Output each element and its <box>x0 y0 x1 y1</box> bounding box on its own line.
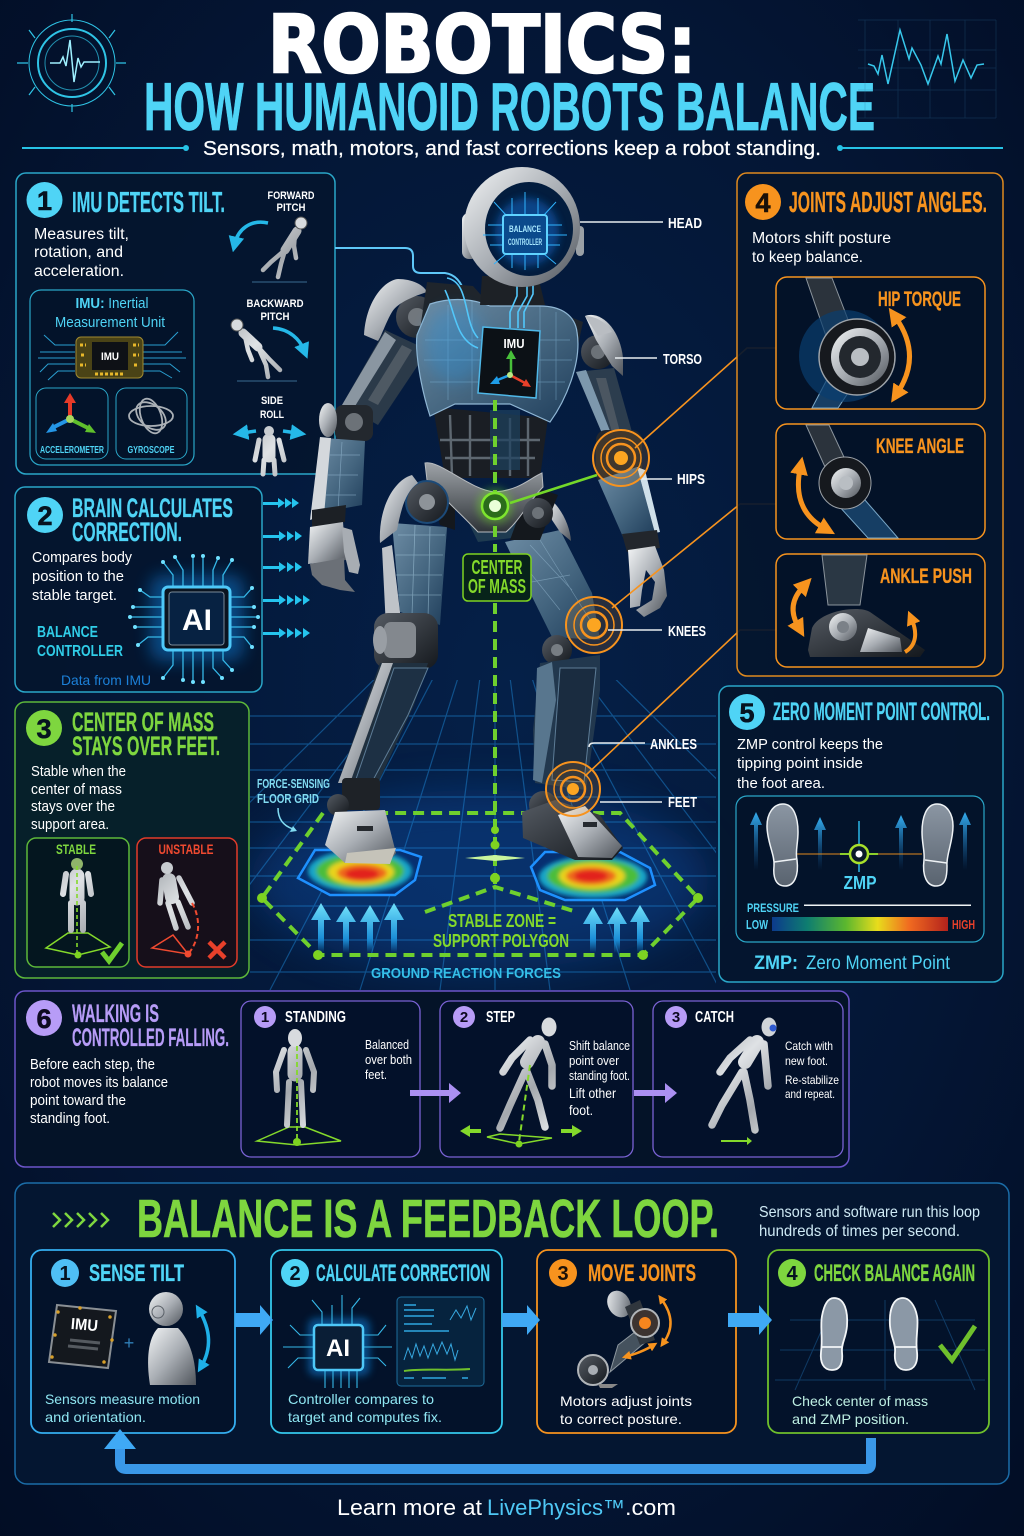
ZMP definition <box>754 953 951 974</box>
pressure arrows <box>750 812 971 870</box>
ribs <box>433 407 548 478</box>
badge 1 <box>26 182 62 218</box>
body part labels: HIPS <box>677 471 705 488</box>
foot floor grid <box>775 1300 985 1390</box>
heading <box>72 1000 229 1052</box>
footer: LivePhysics™ <box>487 1495 625 1520</box>
floor grid <box>250 680 716 990</box>
icon: left sole <box>821 1298 847 1370</box>
ZMP target <box>840 821 878 872</box>
body text: Measures tilt, <box>34 226 129 243</box>
balance controller label <box>37 624 123 660</box>
left shoe print <box>767 804 798 886</box>
center of mass line <box>257 400 703 960</box>
footer: .com <box>625 1495 676 1520</box>
badge 4: 4 <box>755 188 771 218</box>
body text: Stable when the <box>31 764 126 780</box>
heading <box>72 707 220 761</box>
label: center of mass: CENTER <box>472 557 523 579</box>
chevrons <box>53 1213 108 1227</box>
orange connector lines <box>585 348 776 776</box>
torso shell <box>417 300 578 422</box>
icon: IMU chip <box>38 332 186 380</box>
box 4: check balance again: and ZMP position. <box>792 1411 909 1427</box>
body text: ZMP control keeps the <box>737 736 883 753</box>
pressure legend: PRESSURE <box>747 901 799 915</box>
shoulder yoke <box>417 282 583 350</box>
unstable example: UNSTABLE <box>158 841 214 857</box>
pressure legend <box>746 901 975 932</box>
data from IMU: Data from IMU <box>61 672 151 688</box>
hip torque box <box>776 277 985 409</box>
force-sensing floor grid label: FORCE-SENSING <box>257 777 330 791</box>
box 4: check balance again: Check center of mass <box>792 1393 928 1409</box>
panel 4: joints adjust angles <box>737 173 1003 676</box>
body text: standing foot. <box>30 1111 110 1127</box>
stable example: STABLE <box>56 841 96 857</box>
body text <box>737 736 883 792</box>
icon: IMU chip: IMU <box>70 1316 99 1335</box>
step 2: step <box>440 1001 633 1157</box>
ZMP definition: Zero Moment Point <box>806 953 951 974</box>
left foot <box>325 778 396 864</box>
right arm <box>576 315 667 617</box>
panel 3: center of mass stays over feet <box>15 702 249 978</box>
badge 3 <box>26 710 62 746</box>
step 1: standing: 1 <box>261 1009 269 1026</box>
badge 6: 6 <box>36 1004 52 1034</box>
head: BALANCE <box>509 224 541 235</box>
ZMP diagram <box>736 796 984 942</box>
step 2: step: point over <box>569 1054 619 1068</box>
unstable example <box>137 838 237 967</box>
body text: robot moves its balance <box>30 1075 168 1091</box>
step 3: catch: new foot. <box>785 1054 828 1068</box>
backward pitch figure: BACKWARD <box>246 298 304 310</box>
icon: pulse sensor ring <box>17 14 126 112</box>
step 1: standing: STANDING <box>285 1009 346 1026</box>
pressure legend: LOW <box>746 917 769 932</box>
box 3: move joints: MOVE JOINTS <box>588 1260 696 1287</box>
center of mass marker <box>477 475 597 524</box>
step 3: catch: Re-stabilize <box>785 1073 839 1087</box>
heading: BRAIN CALCULATES <box>72 493 233 523</box>
ZMP definition: ZMP: <box>754 953 798 974</box>
body text: the foot area. <box>737 775 825 792</box>
body text: tipping point inside <box>737 755 863 772</box>
ankle push box: ANKLE PUSH <box>880 565 972 588</box>
floor glow <box>250 790 710 970</box>
stable zone polygon <box>262 813 698 955</box>
hip torque box: HIP TORQUE <box>878 288 961 311</box>
arrows from controller <box>263 498 310 638</box>
balance controller label: BALANCE <box>37 624 98 641</box>
stable zone label: SUPPORT POLYGON <box>433 931 569 951</box>
body text: support area. <box>31 817 109 833</box>
step 2: step: standing foot. <box>569 1069 630 1083</box>
knee angle box <box>776 424 985 539</box>
step 2: step: Lift other <box>569 1085 616 1101</box>
icon: robot joint <box>578 1286 671 1388</box>
badge 4 <box>745 184 781 220</box>
body part labels: KNEES <box>668 623 706 640</box>
body text: stays over the <box>31 799 115 815</box>
step 2: step: Shift balance <box>569 1039 630 1053</box>
body text: position to the <box>32 568 124 585</box>
flow arrow 3 <box>728 1305 772 1335</box>
gyroscope box <box>116 388 187 459</box>
badge 5: 5 <box>739 698 755 728</box>
label: center of mass: OF MASS <box>468 576 526 598</box>
accelerometer box: ACCELEROMETER <box>40 445 105 456</box>
tagline rules <box>22 145 1003 151</box>
step 2: step: foot. <box>569 1102 593 1118</box>
body part labels: TORSO <box>663 351 702 368</box>
step 1: standing: Balanced <box>365 1038 409 1052</box>
box 3: move joints: to correct posture. <box>560 1411 682 1427</box>
purple arrow 2 <box>634 1083 677 1103</box>
body text: to keep balance. <box>752 249 863 266</box>
heatmap: left foot <box>298 850 421 895</box>
ankle push box <box>776 554 985 667</box>
icon: AI chip <box>130 556 258 682</box>
badge 1: 1 <box>37 186 52 216</box>
body text <box>34 226 129 280</box>
step 3: catch: 3 <box>672 1009 680 1026</box>
box 1: sense tilt: SENSE TILT <box>89 1260 184 1287</box>
backward pitch figure <box>231 298 304 381</box>
target: ankles <box>546 762 600 816</box>
box 2: calculate correction: CALCULATE CORRECTION <box>316 1260 490 1287</box>
panel 2: brain calculates correction <box>15 487 262 692</box>
box 2: calculate correction: target and computes fix. <box>288 1409 442 1425</box>
step 3: catch: CATCH <box>695 1009 734 1026</box>
icon: right sole <box>890 1298 918 1370</box>
target: hips <box>593 430 649 486</box>
forward pitch figure: PITCH <box>276 202 306 214</box>
step 3: catch: Catch with <box>785 1039 833 1053</box>
backward pitch figure: PITCH <box>260 311 290 323</box>
footer <box>337 1495 676 1520</box>
box 1: sense tilt <box>31 1250 235 1433</box>
body text <box>30 1057 168 1127</box>
badge 6 <box>26 1000 62 1036</box>
icon: waveform chart <box>858 20 996 118</box>
force-sensing floor grid label <box>257 777 330 832</box>
panel: feedback loop <box>15 1183 1009 1484</box>
icon: AI chip <box>283 1295 392 1388</box>
body text <box>31 764 126 833</box>
body text: acceleration. <box>34 263 124 280</box>
body text: stable target. <box>32 587 117 604</box>
body text <box>752 230 891 266</box>
box 2: calculate correction: Controller compares to <box>288 1391 434 1407</box>
circuits to head <box>445 268 533 348</box>
badge 3: 3 <box>36 714 52 744</box>
box 3: move joints: Motors adjust joints <box>560 1393 692 1409</box>
box 1: sense tilt: + <box>124 1333 134 1353</box>
right shoe print <box>922 804 953 886</box>
heading: CENTER OF MASS <box>72 707 214 737</box>
step 2: step: STEP <box>486 1009 515 1026</box>
step 2: step: 2 <box>460 1009 468 1026</box>
IMU definition box <box>30 290 194 465</box>
force-sensing floor grid label: FLOOR GRID <box>257 792 319 806</box>
badge 2 <box>27 497 63 533</box>
accelerometer box <box>36 388 108 459</box>
body text <box>32 549 132 604</box>
title: ROBOTICS: ROBOTICS: <box>268 0 696 91</box>
step 1: standing: feet. <box>365 1068 387 1082</box>
step 1: standing: over both <box>365 1053 412 1067</box>
chest IMU card <box>478 327 540 398</box>
panel 5: zero moment point control <box>719 686 1003 982</box>
step 3: catch: and repeat. <box>785 1087 835 1101</box>
sub text: hundreds of times per second. <box>759 1223 960 1240</box>
icon: check mark <box>940 1326 975 1360</box>
head <box>462 167 584 287</box>
neck <box>480 276 545 305</box>
return arrow <box>120 1438 871 1469</box>
chest IMU card: IMU <box>504 336 524 351</box>
heading: STAYS OVER FEET. <box>72 731 220 761</box>
pelvis <box>380 463 558 543</box>
step 3: catch <box>653 1001 843 1157</box>
left arm <box>308 279 438 592</box>
badge 2: 2 <box>37 501 53 531</box>
flow arrow 2 <box>502 1305 540 1335</box>
ground reaction force arrows <box>311 903 650 953</box>
IMU definition box: IMU: Inertial <box>76 295 148 312</box>
stable zone label <box>433 911 569 951</box>
body text: Before each step, the <box>30 1057 155 1073</box>
icon: IMU chip: IMU <box>101 351 119 363</box>
knee angle box: KNEE ANGLE <box>876 435 964 458</box>
heading: BALANCE IS A FEEDBACK LOOP. <box>137 1189 719 1249</box>
box 1: sense tilt: and orientation. <box>45 1409 146 1425</box>
body part labels: HEAD <box>668 215 702 232</box>
stable example <box>27 838 129 967</box>
legs <box>338 497 600 790</box>
step 1: standing <box>241 1001 420 1157</box>
badge 5 <box>729 694 765 730</box>
body part labels: FEET <box>668 794 697 811</box>
side roll figure: ROLL <box>260 409 284 421</box>
flow arrow 1 <box>235 1305 273 1335</box>
box 2: calculate correction: 2 <box>289 1263 301 1285</box>
side roll figure <box>242 395 297 474</box>
icon: tilting robot <box>148 1292 196 1385</box>
box 1: sense tilt: 1 <box>59 1263 71 1285</box>
body part labels: ANKLES <box>650 736 697 753</box>
body text: point toward the <box>30 1093 126 1109</box>
panel 6: walking is controlled falling <box>15 991 849 1167</box>
head: CONTROLLER <box>508 237 542 248</box>
tagline: Sensors, math, motors, and fast corrections keep a robot standing. <box>203 138 821 160</box>
heading <box>72 493 233 547</box>
dashboard <box>397 1297 484 1386</box>
icon: AI chip: AI <box>326 1335 350 1362</box>
target: knees <box>566 597 622 653</box>
purple arrow 1 <box>410 1083 461 1103</box>
box 1: sense tilt: Sensors measure motion <box>45 1391 200 1407</box>
forward pitch figure <box>235 190 315 282</box>
heatmap: right foot <box>531 852 655 900</box>
box 3: move joints <box>537 1250 736 1433</box>
IMU link line <box>335 248 465 295</box>
side roll figure: SIDE <box>261 395 283 407</box>
title block <box>22 0 1003 160</box>
box 2: calculate correction <box>271 1250 502 1433</box>
box 4: check balance again <box>768 1250 989 1433</box>
right foot <box>522 791 623 860</box>
heading: IMU DETECTS TILT. <box>72 187 225 219</box>
robot <box>308 167 667 790</box>
icon: AI chip: AI <box>182 604 212 637</box>
gyroscope box: GYROSCOPE <box>128 445 175 456</box>
balance controller label: CONTROLLER <box>37 643 123 660</box>
sub text <box>759 1204 980 1240</box>
heading: WALKING IS <box>72 1000 159 1028</box>
footer: Learn more at <box>337 1495 482 1520</box>
ZMP diagram: ZMP <box>844 873 876 893</box>
heading: CORRECTION. <box>72 517 182 547</box>
sub text: Sensors and software run this loop <box>759 1204 980 1221</box>
body text: rotation, and <box>34 244 123 261</box>
stable zone label: STABLE ZONE = <box>448 911 556 931</box>
forward pitch figure: FORWARD <box>268 190 315 202</box>
pressure legend: HIGH <box>952 917 975 932</box>
box 4: check balance again: 4 <box>786 1263 798 1285</box>
ground reaction forces label: GROUND REACTION FORCES <box>371 965 561 982</box>
body text: Motors shift posture <box>752 230 891 247</box>
IMU definition box: Measurement Unit <box>55 314 166 331</box>
body text: Compares body <box>32 549 132 566</box>
label: center of mass <box>463 554 531 601</box>
icon: IMU chip <box>49 1305 116 1368</box>
body text: center of mass <box>31 782 122 798</box>
body part labels <box>580 215 706 811</box>
box 3: move joints: 3 <box>557 1263 569 1285</box>
heading: CONTROLLED FALLING. <box>72 1024 229 1052</box>
